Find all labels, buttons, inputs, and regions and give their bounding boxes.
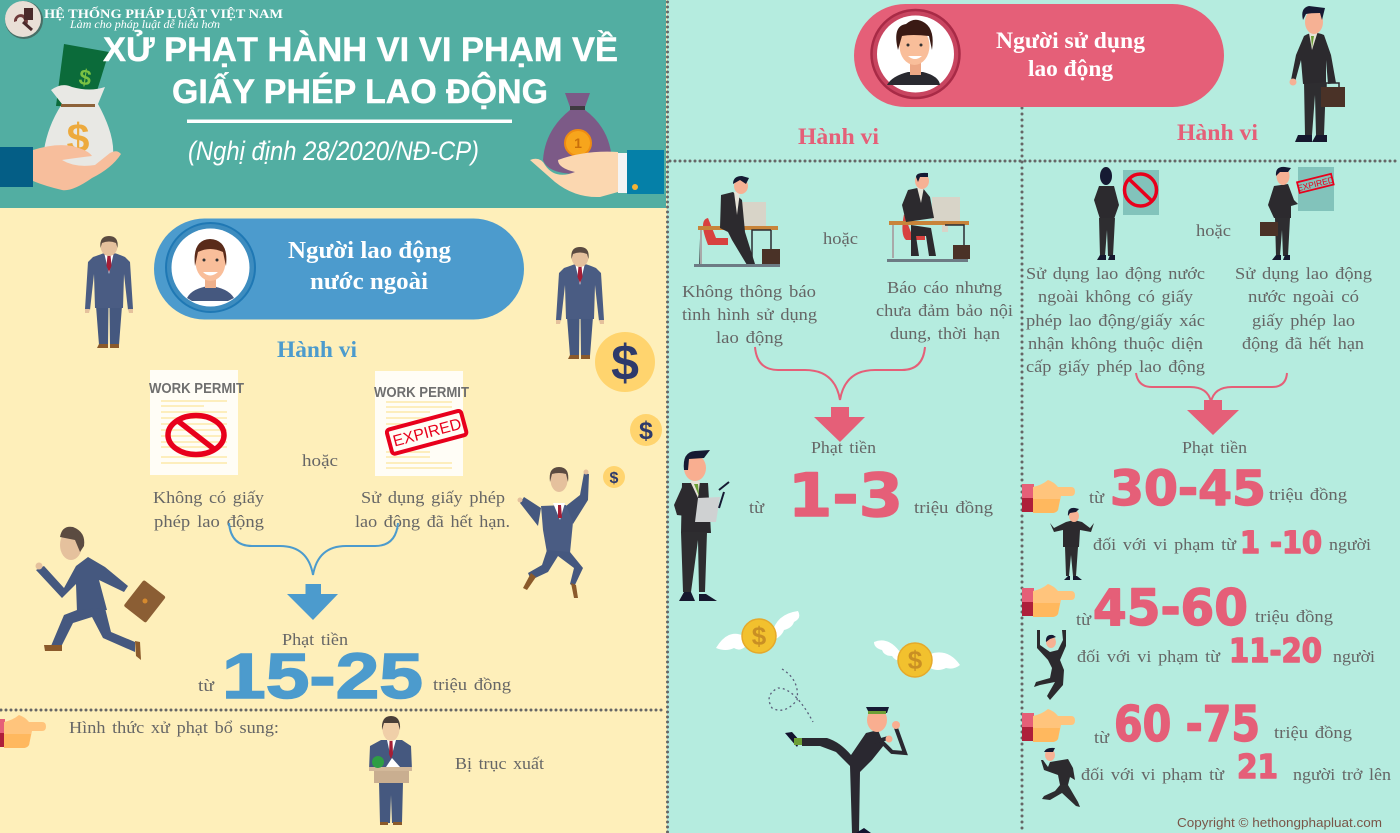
text: inadequate report: dung, thời hạn (890, 324, 1001, 343)
text: violation 1-10: đối với vi phạm từ (1093, 535, 1237, 554)
figure: man carrying box (369, 716, 412, 825)
vertical dotted divider between panels (666, 2, 669, 833)
icon: medium dollar coin: $ (639, 417, 653, 445)
icon: large dollar coin (595, 332, 655, 392)
text: from: từ (1076, 610, 1092, 629)
text: employing without permit (1026, 264, 1206, 376)
text: people: người (1333, 647, 1375, 666)
number: fine 15-25: 15-25 (222, 640, 423, 712)
panel: header (0, 0, 666, 208)
banner label line 2: lao động (1028, 56, 1113, 81)
text: from: từ (1094, 728, 1110, 747)
text: employing without permit: nhận không thuộc diện (1028, 334, 1204, 353)
arrow: blue down (287, 584, 338, 620)
text: employing with expired permit: giấy phép lao (1252, 311, 1355, 330)
panel: foreign worker background (0, 0, 667, 833)
text: employing with expired permit (1235, 264, 1373, 353)
icon: pointing hand 1 (1022, 480, 1075, 513)
icon: money bag left with hand (0, 44, 121, 190)
text: million dong: triệu đồng (1255, 607, 1334, 626)
icon: money bag right with hand: 1 (574, 135, 582, 151)
arrow: pink left (814, 407, 865, 442)
icon: work permit no (149, 370, 244, 475)
figure: man with clipboard (674, 450, 729, 601)
icon: work permit no: WORK PERMIT (149, 381, 244, 397)
text: fail to report: tình hình sử dụng (682, 305, 818, 324)
text: violation 21+: đối với vi phạm từ (1081, 765, 1225, 784)
text: million dong: triệu đồng (1269, 485, 1348, 504)
text: or (employer left): hoặc (823, 229, 858, 248)
icon: small dollar coin (603, 466, 625, 488)
icon: large dollar coin: $ (611, 335, 639, 391)
icon: medium dollar coin (630, 414, 662, 446)
text: from: từ (1089, 488, 1105, 507)
heading: behaviour: Hành vi (277, 337, 358, 362)
brace: blue (229, 523, 398, 575)
text: million dong: triệu đồng (1274, 723, 1353, 742)
text: employing without permit: phép lao động/giấy xác (1026, 311, 1205, 330)
figure: man arms out (1050, 508, 1094, 580)
text: inadequate report: Báo cáo nhưng (887, 278, 1003, 297)
text: employing with expired permit: nước ngoài có (1248, 287, 1359, 306)
figure: running man small (1041, 748, 1080, 807)
figure: man facing expired sign: EXPIRED (1296, 175, 1335, 193)
title line 2: GIẤY PHÉP LAO ĐỘNG (172, 72, 548, 111)
number: 30-45: 30-45 (1110, 461, 1266, 517)
figure: man right (556, 247, 604, 359)
text: fail to report (682, 282, 818, 347)
text: expired permit (355, 488, 510, 531)
text: or (employer right): hoặc (1196, 221, 1231, 240)
text: no work permit: Không có giấy (153, 488, 265, 507)
text: employing without permit: cấp giấy phép lao động (1026, 357, 1206, 376)
text: people: người (1329, 535, 1371, 554)
figure: man left (85, 236, 133, 348)
icon: pointing hand (0, 715, 46, 748)
icon: work permit expired: EXPIRED (391, 416, 463, 450)
text: people and above: người trở lên (1293, 765, 1392, 784)
text: employing without permit: Sử dụng lao động nước (1026, 264, 1205, 283)
text: no work permit (153, 488, 265, 531)
text: expired permit: lao động đã hết hạn. (355, 512, 510, 531)
text: inadequate report: chưa đảm bảo nội (876, 301, 1013, 320)
dashed flight path (769, 669, 813, 722)
text: from: từ (198, 676, 215, 695)
icon: small dollar coin: $ (610, 470, 619, 487)
text: violation 11-20: đối với vi phạm từ (1077, 647, 1221, 666)
text: inadequate report (876, 278, 1013, 343)
figure: man facing no-permit sign (1094, 167, 1159, 260)
icon: pointing hand 3 (1022, 709, 1075, 742)
text: employing with expired permit: Sử dụng lao động (1235, 264, 1373, 283)
figure: jumping man (518, 467, 589, 598)
heading: behaviour right: Hành vi (1177, 120, 1259, 145)
icon: winged coin left: $ (752, 621, 767, 651)
text: employing with expired permit: động đã hết hạn (1242, 334, 1365, 353)
icon: pointing hand 2 (1022, 584, 1075, 617)
panel: employer background (667, 0, 1400, 833)
text: deported: Bị trục xuất (455, 754, 544, 773)
text: fine label right: Phạt tiền (1182, 438, 1248, 457)
logo (5, 1, 43, 39)
arrow: pink right (1187, 400, 1239, 435)
text: fine label: Phạt tiền (282, 630, 349, 649)
text: expired permit: Sử dụng giấy phép (361, 488, 505, 507)
figure: running man with briefcase (36, 527, 166, 660)
icon: money bag left with hand: $ (77, 64, 93, 91)
number: 11-20: 11-20 (1229, 631, 1322, 670)
number: fine 1-3: 1-3 (788, 461, 903, 531)
icon: work permit expired (374, 371, 469, 476)
icon: winged coin right: $ (908, 645, 923, 675)
title: XỬ PHẠT HÀNH VI VI PHẠM VỀ (103, 31, 618, 69)
banner: employer (854, 4, 1224, 107)
text: million dong: triệu đồng (914, 498, 994, 517)
figure: desk worker on phone (694, 176, 780, 267)
number: 21: 21 (1237, 747, 1278, 786)
panel: foreign worker section (0, 218, 662, 825)
figure: man facing expired sign (1260, 167, 1335, 260)
number: 1-10: 1 -10 (1240, 526, 1322, 561)
icon: work permit expired: WORK PERMIT (374, 385, 469, 401)
number: 45-60: 45-60 (1093, 579, 1248, 637)
text: or: hoặc (302, 451, 339, 470)
text: employing without permit: ngoài không có giấy (1038, 287, 1194, 306)
figure: businessman top right (1290, 6, 1345, 142)
banner label: Người sử dụng (996, 28, 1146, 53)
banner label line 2: nước ngoài (310, 269, 428, 295)
panel: employer section (674, 4, 1392, 833)
slogan: Làm cho pháp luật dễ hiểu hơn (69, 18, 220, 31)
icon: money bag right with hand (530, 93, 664, 197)
text: fine label left: Phạt tiền (811, 438, 877, 457)
text: million dong: triệu đồng (433, 675, 512, 694)
subtitle: (Nghị định 28/2020/NĐ-CP) (188, 136, 479, 166)
text: no work permit: phép lao động (154, 512, 265, 531)
brace: pink left (755, 347, 925, 400)
banner label: Người lao động (288, 238, 451, 264)
icon: money bag left with hand: $ (67, 115, 90, 161)
text: fail to report: Không thông báo (682, 282, 816, 301)
banner: foreign worker (154, 218, 524, 320)
organisation name: HỆ THỐNG PHÁP LUẬT VIỆT NAM (44, 6, 283, 21)
brace: pink right (1136, 373, 1287, 402)
copyright: Copyright © hethongphapluat.com (1177, 815, 1382, 830)
icon: winged coin left (716, 611, 799, 653)
heading: behaviour left: Hành vi (798, 124, 880, 149)
text: additional penalty: Hình thức xử phạt bổ sung: (69, 718, 279, 737)
figure: desk worker on computer (887, 173, 970, 262)
text: fail to report: lao động (716, 328, 784, 347)
figure: jumping man (1034, 630, 1066, 700)
number: 60-75: 60 -75 (1114, 696, 1260, 753)
icon: winged coin right (874, 640, 960, 677)
figure: kicking man (785, 707, 905, 833)
text: from: từ (749, 498, 765, 517)
